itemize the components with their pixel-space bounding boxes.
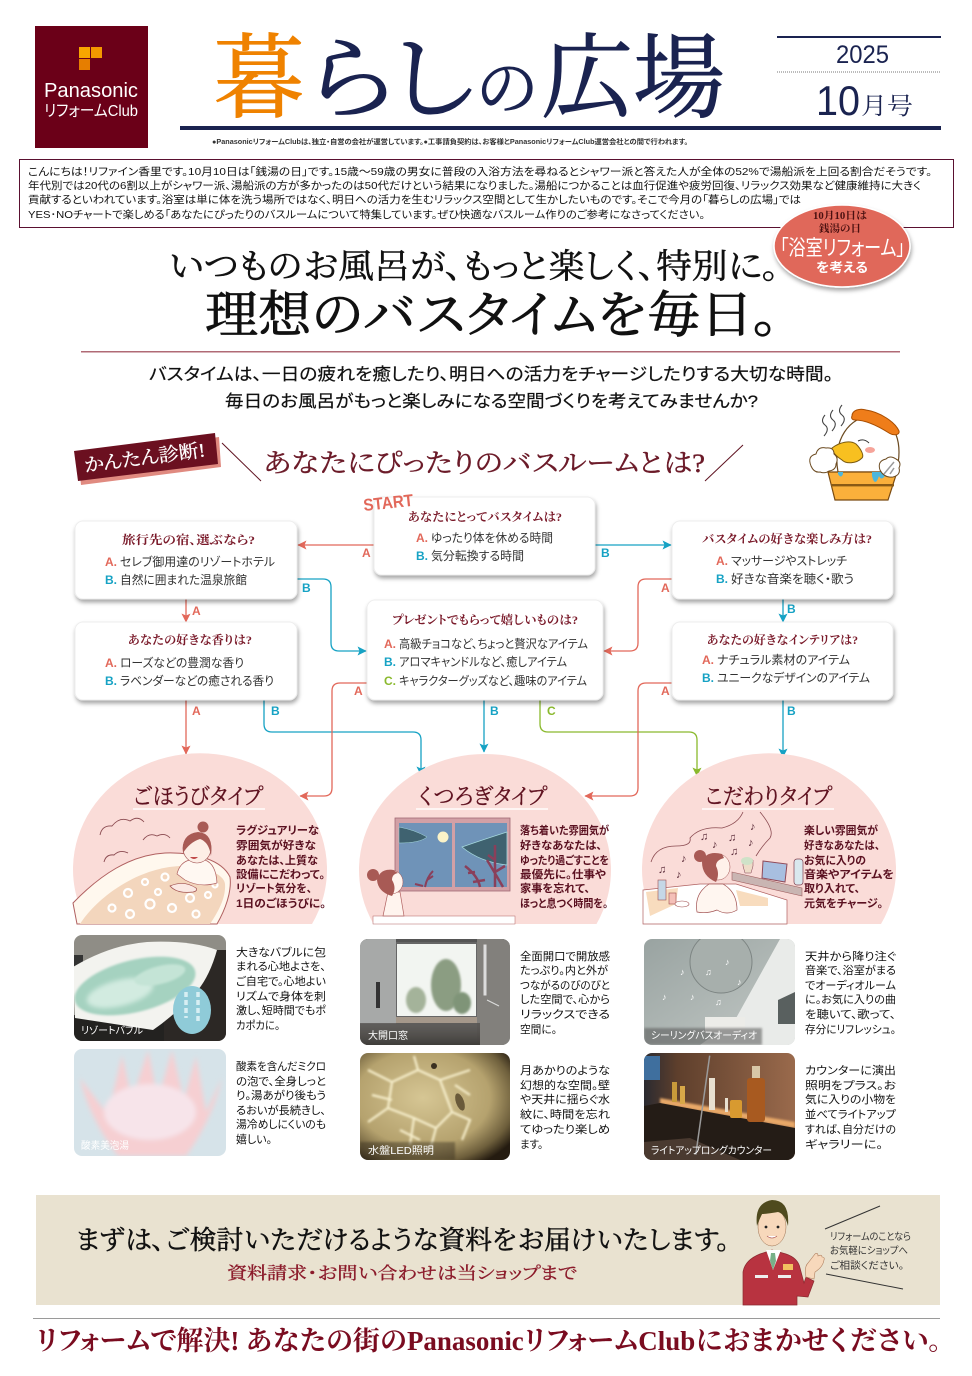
text: large opening window: した空間で、心から (520, 993, 610, 1006)
text: resort bubble (236, 945, 326, 1032)
description: お気に入りの (804, 853, 866, 867)
photo: ceiling bath audio: ♪ (737, 977, 742, 987)
description: 音楽やアイテムを (804, 867, 894, 881)
description: 落ち着いた雰囲気が (520, 823, 609, 837)
photo: ceiling bath audio: ♪ (680, 967, 684, 977)
card: interior question: あなたの好きなインテリアは? (707, 632, 858, 647)
panel: relax type (359, 754, 611, 924)
card: enjoyment question: バスタイムの好きな楽しみ方は? (702, 531, 872, 546)
photo: oxygen bubbles (74, 1049, 226, 1156)
text: large opening window: リラックスできる (520, 1008, 610, 1021)
text: resort bubble: まれる心地よさを、 (236, 960, 326, 973)
chart heading: あなたにぴったりのバスルームとは? (264, 449, 705, 478)
logo: リフォームClub (44, 103, 138, 120)
label: start: START (362, 491, 415, 515)
issue date: 月号 (861, 93, 913, 120)
description: 家事を忘れて、 (520, 881, 590, 895)
text: water LED lighting: ます。 (520, 1138, 543, 1151)
title: 暮 (213, 28, 305, 130)
photo: light-up long counter (644, 1053, 795, 1160)
arrow labels: B (601, 546, 610, 560)
text: light-up long counter: 照明をプラス。お (805, 1079, 896, 1092)
text: ceiling bath audio: 存分にリフレッシュ。 (805, 1022, 896, 1036)
text: ceiling bath audio: に。お気に入りの曲 (805, 992, 896, 1006)
card: scent question: ラベンダーなどの癒される香り (120, 673, 274, 688)
description: 楽しい雰囲気が (804, 823, 878, 837)
text: oxygen bubbles: 嬉しい。 (236, 1132, 272, 1146)
tag: easy diagnosis: かんたん診断! (83, 439, 207, 477)
photo: large opening window: 大開口窓 (368, 1029, 408, 1042)
description: ほっと息つく時間を。 (520, 896, 608, 910)
description: 元気をチャージ。 (804, 896, 883, 910)
text: large opening window (520, 949, 610, 1036)
photo: water LED lighting (360, 1053, 510, 1160)
card: travel question: 自然に囲まれた温泉旅館 (120, 572, 247, 587)
heading: くつろぎタイプ (418, 784, 548, 809)
illustration: bubble bath (73, 818, 230, 924)
card: start question: 気分転換する時間 (431, 548, 524, 563)
card: enjoyment question: B. (716, 572, 728, 586)
description (520, 823, 609, 910)
arrow labels: B (787, 704, 796, 718)
description: 雰囲気が好きな (236, 838, 316, 852)
photo: ceiling bath audio (644, 931, 795, 1045)
photo: water LED lighting: 水盤LED照明 (368, 1144, 434, 1157)
lead text: バスタイムは、一日の疲れを癒したり、明日への活力をチャージしたりする大切な時間。 (149, 365, 833, 384)
illustration: music in the bath: ♪ (712, 839, 718, 851)
text: water LED lighting: 幻想的な空間。壁 (520, 1078, 610, 1092)
card: start question: あなたにとってバスタイムは? (408, 510, 562, 524)
panel: particular type (642, 753, 896, 924)
text: resort bubble: 激し、短時間でもポ (236, 1003, 326, 1017)
badge: bathroom reform: を考える (816, 260, 868, 275)
card: scent question: B. (105, 674, 117, 688)
arrow labels: B (490, 704, 499, 718)
arrow labels: A (661, 684, 670, 698)
text: resort bubble: リズムで身体を刺 (236, 989, 326, 1003)
arrow labels: A (192, 604, 201, 618)
arrow labels: A (362, 546, 371, 560)
card: enjoyment question: 好きな音楽を聴く・歌う (731, 572, 854, 586)
text: large opening window: 全面開口で開放感 (520, 949, 610, 963)
illustration: music in the bath (643, 812, 803, 924)
arrow labels: A (354, 684, 363, 698)
photo: ceiling bath audio: ♪ (662, 992, 666, 1002)
card: enjoyment question: マッサージやストレッチ (731, 554, 847, 568)
heading: こだわりタイプ (705, 784, 833, 809)
text: ceiling bath audio: 音楽で、浴室がまる (805, 963, 896, 977)
description: 最優先に。仕事や (520, 867, 606, 881)
arrow labels: A (192, 704, 201, 718)
photo: oxygen bubbles: 酸素美泡湯 (81, 1139, 129, 1152)
badge: bathroom reform: 10月10日は (813, 210, 867, 222)
issue date: 2025 (836, 41, 889, 69)
photo: ceiling bath audio: ♫ (715, 997, 722, 1007)
description: 好きなあなたは、 (804, 838, 880, 852)
icon: bathing chicken (810, 405, 900, 500)
photo: ceiling bath audio: ♪ (690, 992, 694, 1002)
text: water LED lighting: 月あかりのような (520, 1064, 610, 1077)
card: gift question: キャラクターグッズなど、趣味のアイテム (399, 673, 587, 688)
card: start question: ゆったり体を休める時間 (431, 531, 553, 545)
card: interior question: ユニークなデザインのアイテム (717, 670, 870, 685)
text: large opening window: 空間に。 (520, 1023, 557, 1036)
main headline: いつものお風呂が、もっと楽しく、特別に。 (168, 248, 780, 286)
photo: ceiling bath audio: シーリングバスオーディオ (651, 1029, 757, 1042)
description: 好きなあなたは、 (520, 838, 602, 852)
card: enjoyment question: A. (716, 554, 728, 568)
card: enjoyment question (672, 521, 893, 599)
heading: ごほうびタイプ (133, 784, 264, 809)
illustration: music in the bath: ♫ (700, 831, 708, 843)
main headline: 理想のバスタイムを毎日。 (205, 287, 780, 343)
text: resort bubble: ご自宅で。心地よい (236, 974, 326, 988)
card: gift question: B. (384, 655, 396, 669)
illustration: music in the bath: ♪ (750, 821, 756, 833)
illustration: music in the bath: ♪ (676, 869, 682, 881)
card: interior question: B. (702, 671, 714, 685)
title: らし (310, 31, 474, 130)
card: travel question: セレブ御用達のリゾートホテル (120, 554, 275, 569)
card: gift question: C. (384, 674, 396, 688)
text: water LED lighting: てゆったり楽しめ (519, 1123, 610, 1136)
text: large opening window: つながるのびのびと (520, 978, 610, 992)
panel: reward type (73, 753, 327, 924)
text: light-up long counter: 気に入りの小物を (805, 1092, 896, 1106)
card: travel question: B. (105, 573, 117, 587)
description: あなたは、上質な (236, 853, 318, 867)
card: gift question: A. (384, 637, 396, 651)
photo: light-up long counter: ライトアップロングカウンター (651, 1144, 772, 1157)
description: ラグジュアリーな (236, 823, 319, 837)
tag: easy diagnosis (74, 433, 221, 485)
card: travel question (75, 521, 297, 599)
description: 1日のごほうびに。 (236, 896, 326, 910)
text: water LED lighting: 紋に、時間を忘れ (520, 1107, 610, 1121)
text: oxygen bubbles (236, 1059, 326, 1146)
illustration: staff member (743, 1200, 824, 1305)
photo: resort bubble (69, 935, 226, 1041)
title (213, 28, 725, 130)
text: ceiling bath audio: を聴いて、歌って、 (805, 1008, 896, 1021)
intro text box: 貢献するといわれています。浴室は単に体を洗う場所ではなく、明日への活力を生むリラックス空間として生かしたいものです。そこで今月の「暮らしの広場」では (28, 193, 801, 206)
card: scent question: A. (105, 656, 117, 670)
illustration: music in the bath: ♪ (681, 853, 686, 865)
arrows between chart cards (186, 545, 783, 796)
footer slogan: リフォームで解決! あなたの街のPanasonicリフォームClubにおまかせください。 (36, 1326, 942, 1356)
arrow labels (192, 546, 796, 718)
illustration: music in the bath: ♫ (728, 832, 736, 844)
photo: ceiling bath audio: ♪ (725, 957, 730, 967)
card: gift question: プレゼントでもらって嬉しいものは? (392, 612, 578, 627)
intro text box: 年代別では20代の6割以上がシャワー派、湯船派の方が多かったのは50代だけという結果になりました。湯船につかることは血行促進や疲労回復、リラックス効果など健康維持に大きく (28, 179, 921, 192)
card: start question: B. (416, 549, 428, 563)
text: resort bubble: 大きなバブルに包 (236, 945, 326, 959)
text: ceiling bath audio: 天井から降り注ぐ (805, 949, 897, 963)
arrow labels: B (302, 581, 311, 595)
call to action subheading: 資料請求・お問い合わせは当ショップまで (227, 1264, 577, 1283)
text: oxygen bubbles: るおいが長続きし、 (236, 1103, 326, 1117)
issue date (777, 36, 941, 124)
card: interior question (672, 622, 893, 700)
intro text box: こんにちは！リファイン香里です。10月10日は「銭湯の日」です。15歳～59歳の男女に普段の入浴方法を尋ねるとシャワー派と答えた人が全体の52%で湯船派を上回る割合だそうです。 (28, 165, 932, 178)
card: scent question (75, 622, 297, 700)
badge: bathroom reform: 銭湯の日 (819, 222, 861, 235)
main headline (168, 248, 780, 343)
arrow labels: B (787, 602, 796, 616)
text: light-up long counter: すれば、自分だけの (805, 1123, 896, 1136)
text: light-up long counter: カウンターに演出 (805, 1064, 896, 1077)
text: resort bubble: カポカに。 (236, 1019, 280, 1032)
description: ゆったり過ごすことを (520, 853, 609, 867)
text: oxygen bubbles: 酸素を含んだミクロ (236, 1059, 326, 1073)
text: oxygen bubbles: り。湯あがり後もう (236, 1088, 326, 1102)
intro text box: YES･NOチャートで楽しめる「あなたにぴったりのバスルームについて特集しています。ぜひ快適なバスルーム作りのご参考になさってください。 (28, 208, 705, 221)
description: 設備にこだわって。 (236, 867, 325, 881)
illustration: music in the bath: ♪ (748, 837, 754, 849)
text: water LED lighting: や天井に揺らぐ水 (520, 1092, 610, 1106)
lead text (149, 365, 833, 411)
card: start question (374, 497, 595, 575)
arrow labels: C (547, 704, 556, 718)
arrow labels: A (661, 581, 670, 595)
description: 取り入れて、 (804, 882, 860, 895)
badge: bathroom reform (774, 205, 910, 287)
photo: ceiling bath audio: ♫ (705, 967, 712, 977)
speech bubble: お気軽にショップへ (830, 1244, 908, 1257)
description (804, 823, 894, 910)
text: oxygen bubbles: の泡で、全身しっと (236, 1074, 326, 1088)
description (236, 823, 326, 910)
text: light-up long counter: 並べてライトアップ (805, 1107, 896, 1121)
speech bubble: ご相談ください。 (830, 1259, 904, 1272)
logo: Panasonic (44, 80, 138, 102)
text: ceiling bath audio (805, 949, 897, 1036)
photo: large opening window (360, 939, 510, 1045)
text: light-up long counter: ギャラリーに。 (805, 1138, 883, 1151)
badge: bathroom reform: 「浴室リフォーム」 (780, 237, 905, 260)
illustration: music in the bath: ♫ (658, 864, 666, 876)
text: light-up long counter (805, 1064, 896, 1151)
text: ceiling bath audio: でオーディオルーム (805, 978, 896, 992)
card: interior question: A. (702, 653, 714, 667)
logo (35, 26, 148, 148)
card: gift question: 高級チョコなど、ちょっと贅沢なアイテム (399, 636, 588, 651)
panel: call to action (36, 1195, 940, 1305)
card: travel question: A. (105, 555, 117, 569)
card: start question: A. (416, 531, 428, 545)
title: の (476, 56, 538, 124)
card: gift question (367, 600, 603, 700)
arrow labels: B (271, 704, 280, 718)
card: scent question: ローズなどの豊潤な香り (120, 655, 244, 670)
photo: resort bubble: リゾートバブル (81, 1024, 143, 1037)
card: gift question: アロマキャンドルなど、癒しアイテム (399, 655, 567, 669)
card: travel question: 旅行先の宿、選ぶなら? (122, 532, 255, 547)
speech bubble (825, 1206, 911, 1289)
text: large opening window: たっぷり。内と外が (520, 963, 608, 977)
title: 広場 (541, 28, 725, 130)
speech bubble: リフォームのことなら (830, 1231, 911, 1243)
card: scent question: あなたの好きな香りは? (128, 632, 252, 647)
text: oxygen bubbles: 湯冷めしにくいのも (236, 1118, 326, 1131)
text: water LED lighting (519, 1064, 610, 1151)
card: interior question: ナチュラル素材のアイテム (717, 653, 850, 667)
intro text box (20, 160, 954, 228)
illustration: music in the bath: ♫ (730, 846, 738, 858)
chart heading (222, 443, 743, 481)
lead text: 毎日のお風呂がもっと楽しみになる空間づくりを考えてみませんか? (225, 392, 758, 411)
disclaimer note: ●PanasonicリフォームClubは、独立・自営の会社が運営しています。●工事請負契約は、お客様とPanasonicリフォームClub運営会社との間で行われます。 (212, 137, 688, 146)
issue date: 10 (816, 77, 860, 124)
illustration: night window (367, 818, 515, 924)
description: リゾート気分を、 (236, 881, 312, 895)
call to action heading: まずは、ご検討いただけるような資料をお届けいたします。 (76, 1226, 730, 1255)
